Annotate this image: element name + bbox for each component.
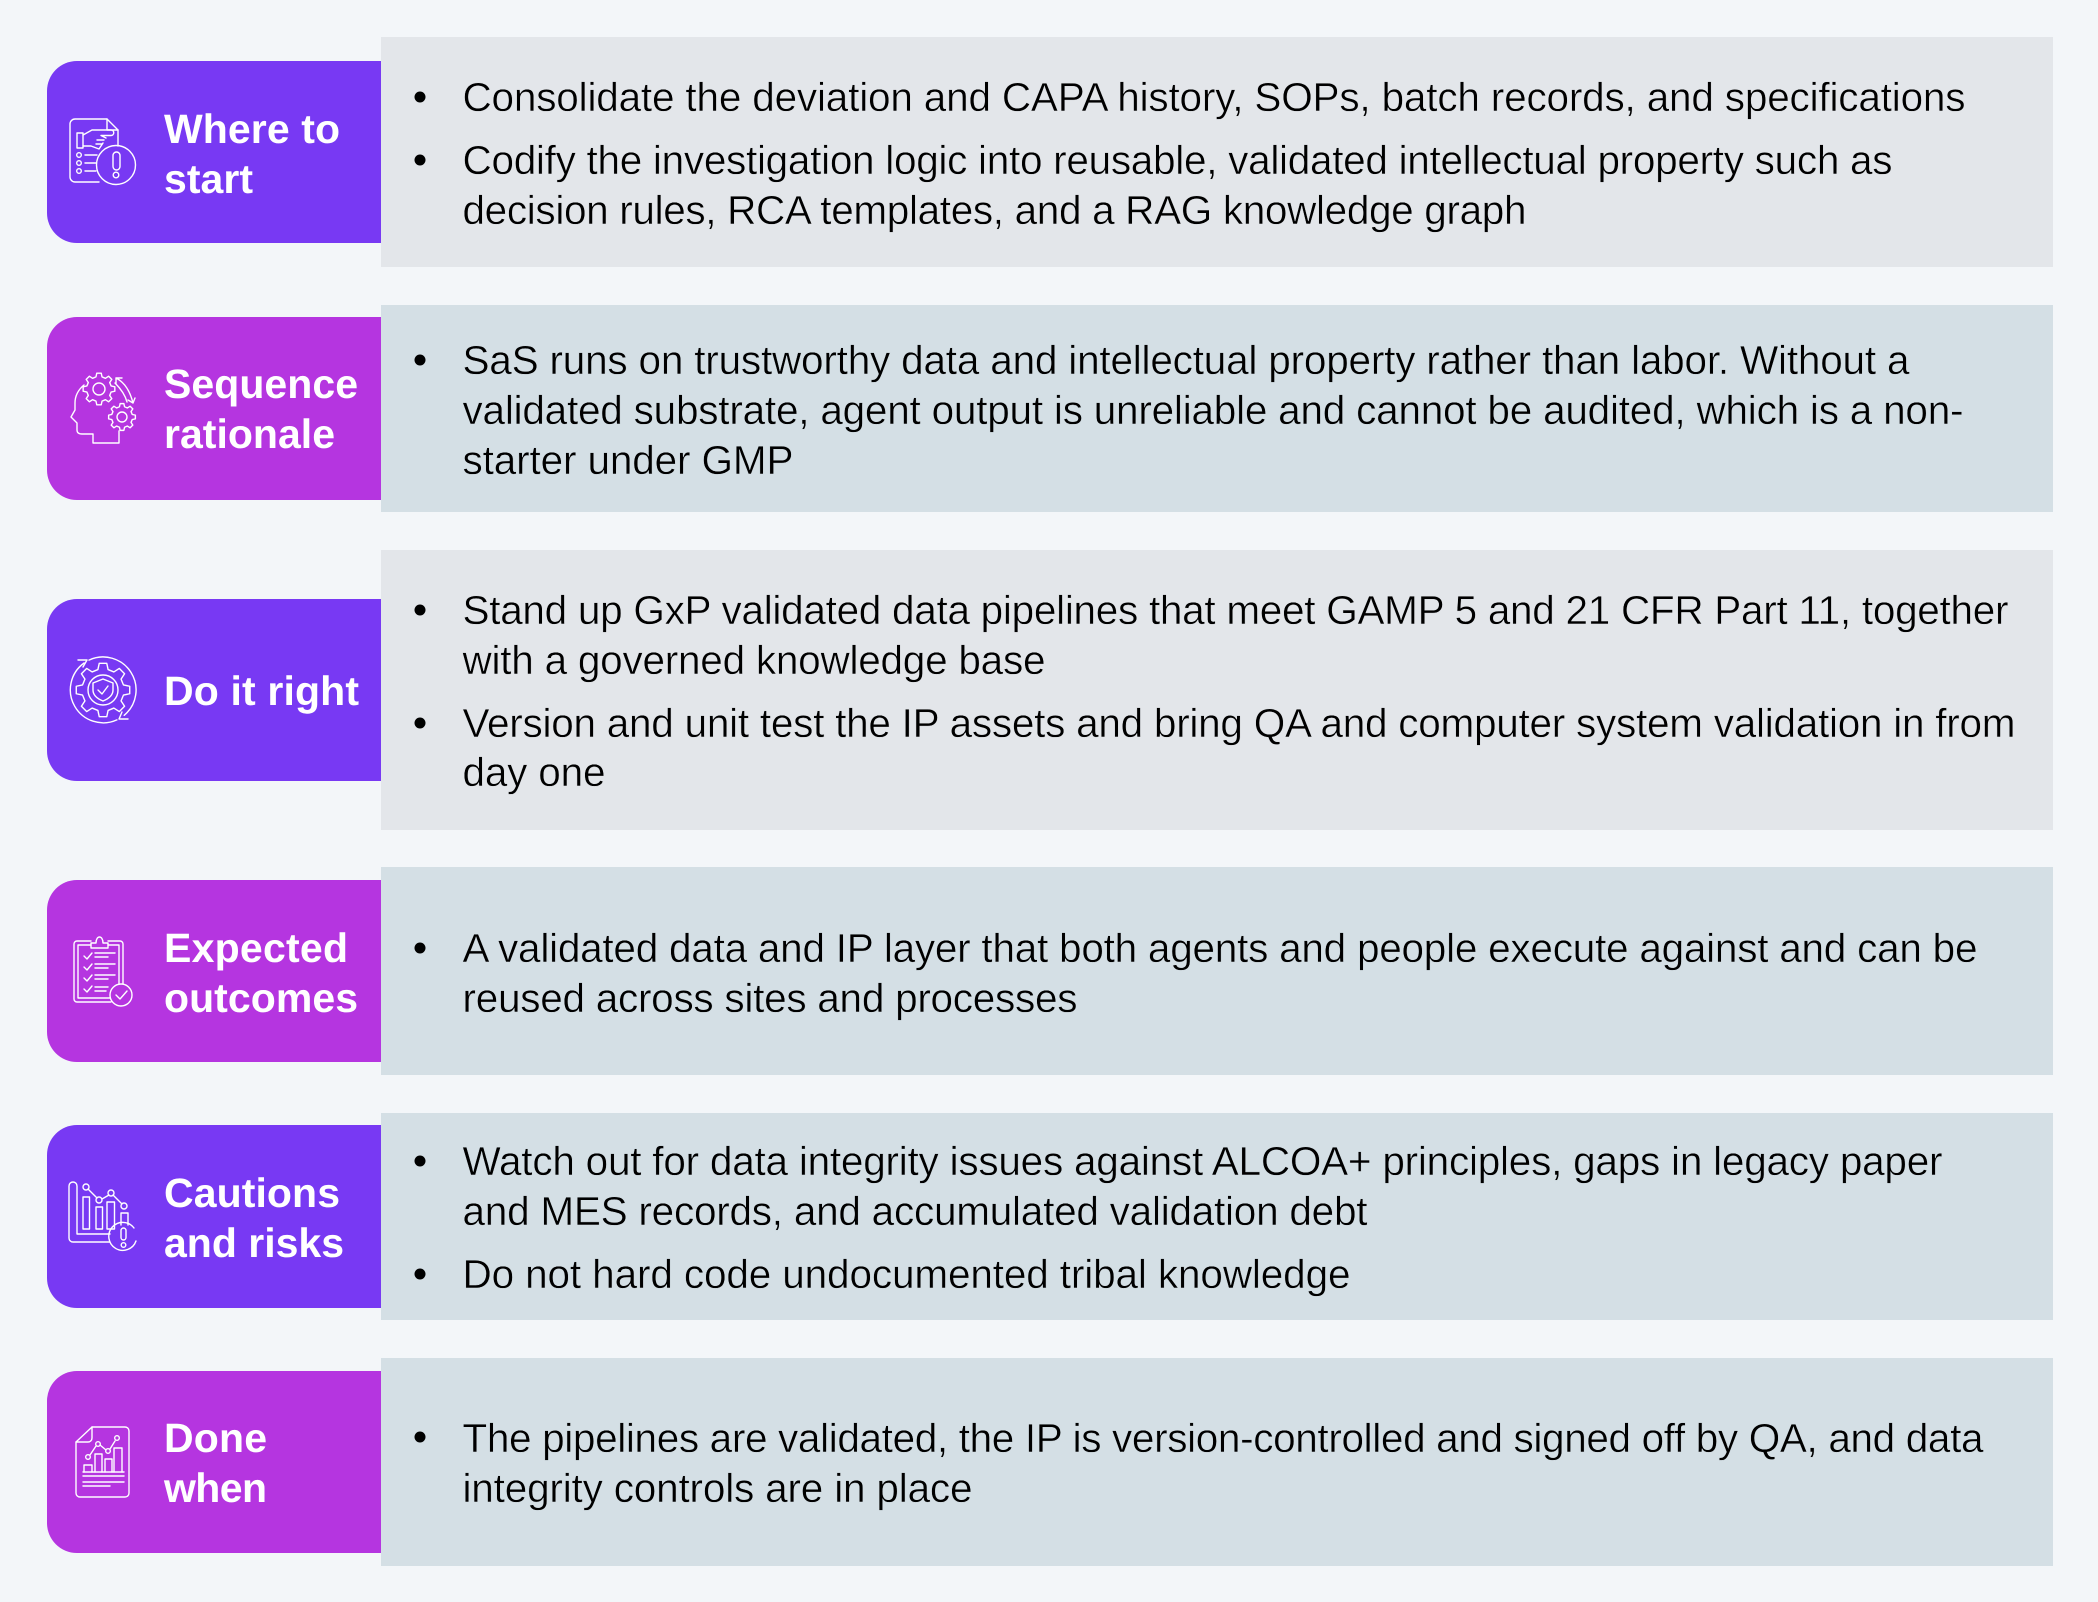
label: done when [163,1415,267,1511]
bullets: do it right: day one [462,749,606,795]
bullets: cautions and risks [414,1138,1942,1297]
bullets: where to start: Codify the investigation logic into reusable, validated intellectual property such as [462,137,1892,183]
label tab: cautions and risks [47,1125,381,1308]
label: where to start: Where to [164,106,340,152]
content panel: expected outcomes [381,867,2053,1075]
icon: report with chart [76,1427,129,1497]
icon: document with pointing hand and alert [70,119,136,184]
bullets: cautions and risks: and MES records, and accumulated validation debt [462,1188,1368,1234]
label: do it right: Do it right [164,668,359,714]
bullets: where to start [414,74,1966,233]
bullets: do it right: Version and unit test the IP assets and bring QA and computer system validation in from [462,700,2016,746]
label tab: do it right [47,599,381,781]
content panel: where to start [381,37,2053,267]
row: Sequence rationale [47,305,2053,512]
label tab: where to start [47,61,381,243]
label: expected outcomes: outcomes [164,975,358,1021]
row: Cautions and risks [47,1113,2053,1320]
row: Done when [47,1358,2053,1566]
bullets: where to start: decision rules, RCA templates, and a RAG knowledge graph [462,187,1526,233]
label: sequence rationale [164,361,358,457]
label: sequence rationale: Sequence [164,361,358,407]
bullets: expected outcomes [414,925,1978,1021]
bullets: done when [414,1415,1984,1511]
icon: gear with shield and cycle arrows [70,657,136,723]
bullets: where to start: Consolidate the deviation and CAPA history, SOPs, batch records, and specifications [462,74,1966,120]
bullets: expected outcomes: A validated data and IP layer that both agents and people execute against and can be [462,925,1978,971]
bullets: cautions and risks: Do not hard code undocumented tribal knowledge [462,1251,1350,1297]
content panel: do it right [381,550,2053,830]
bullets: sequence rationale: validated substrate, agent output is unreliable and cannot be audited, which is a non- [462,387,1964,433]
label: where to start [164,106,340,202]
icon: head with gears [71,373,135,443]
bullets: done when: integrity controls are in place [462,1465,972,1511]
icon: bar chart with alert [69,1182,136,1250]
bullets: sequence rationale: SaS runs on trustworthy data and intellectual property rather than labor. Without a [462,337,1910,383]
bullets: do it right: Stand up GxP validated data pipelines that meet GAMP 5 and 21 CFR Part 11, together [462,587,2008,633]
label: cautions and risks: and risks [164,1220,344,1266]
label: expected outcomes: Expected [164,925,348,971]
label tab: expected outcomes [47,880,381,1062]
content panel: done when [381,1358,2053,1566]
label: where to start: start [164,156,253,202]
row: Do it right [47,550,2053,830]
label: sequence rationale: rationale [164,411,335,457]
content panel: cautions and risks [381,1113,2053,1320]
label tab: sequence rationale [47,317,381,500]
bullets: expected outcomes: reused across sites and processes [462,975,1078,1021]
content panel: sequence rationale [381,305,2053,512]
row: Expected outcomes [47,867,2053,1075]
label: cautions and risks [164,1170,344,1266]
label: cautions and risks: Cautions [164,1170,340,1216]
row: Where to start [47,37,2053,267]
icon: clipboard checklist [74,937,132,1006]
bullets: do it right: with a governed knowledge base [462,637,1046,683]
label: expected outcomes [164,925,358,1021]
bullets: done when: The pipelines are validated, the IP is version-controlled and signed off by QA, and data [462,1415,1984,1461]
bullets: do it right [414,587,2016,795]
label: done when: when [163,1465,267,1511]
bullets: cautions and risks: Watch out for data integrity issues against ALCOA+ principles, gaps in legacy paper [462,1138,1942,1184]
label: done when: Done [164,1415,267,1461]
bullets: sequence rationale: starter under GMP [462,437,794,483]
bullets: sequence rationale [414,337,1964,483]
label tab: done when [47,1371,381,1553]
